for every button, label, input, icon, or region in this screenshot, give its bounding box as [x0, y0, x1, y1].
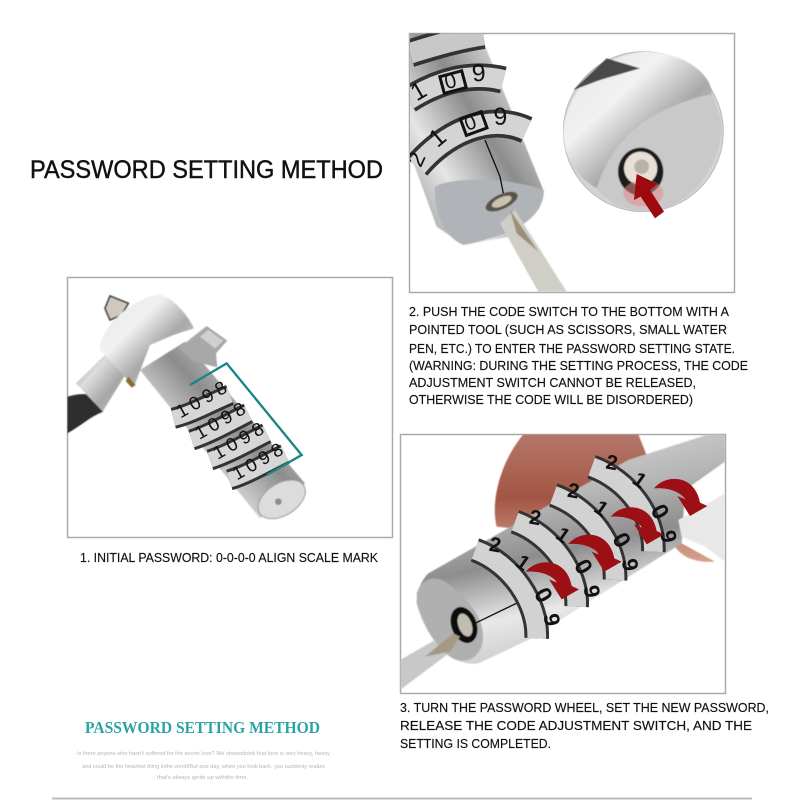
icon: red curved arrows — [526, 479, 707, 599]
icon: fingers turning wheels: 0 — [529, 583, 558, 607]
footer faint text: and could be the heaviest thing inthe world!But one day, when you look back, you suddenly realize — [82, 764, 325, 770]
text block: step 2: ADJUSTMENT SWITCH CANNOT BE RELEASED, — [409, 375, 696, 390]
footer faint text: that's always ignite up withthe time. — [157, 775, 248, 781]
icon: lock end with screwdriver: 9 — [493, 103, 508, 131]
footer heading: PASSWORD SETTING METHOD — [85, 718, 320, 737]
icon: red arrow — [634, 174, 664, 218]
icon: lock end with screwdriver: 0 — [462, 111, 479, 136]
icon: fingers turning wheels: 9 — [617, 557, 643, 573]
text block: step 3: SETTING IS COMPLETED. — [400, 736, 551, 751]
icon: fingers turning wheels: 2 — [527, 506, 543, 530]
icon: lock with four number wheels: 1 0 9 8 — [191, 398, 249, 443]
text block: step 2: OTHERWISE THE CODE WILL BE DISORDERED) — [409, 392, 693, 407]
icon: lock end with screwdriver: 9 — [471, 60, 487, 88]
icon: lock with four number wheels — [67, 294, 312, 527]
icon: lock with four number wheels: 1 0 9 8 — [228, 439, 286, 484]
icon: fingers turning wheels: 0 — [569, 554, 598, 579]
text block: step 2: PEN, ETC.) TO ENTER THE PASSWORD SETTING STATE. — [409, 341, 735, 356]
icon: fingers turning wheels: 2 — [487, 533, 503, 558]
icon: lock end with screwdriver: 1 — [406, 77, 432, 107]
icon: fingers turning wheels: 1 — [511, 550, 534, 576]
icon: lock with four number wheels: 1 0 9 8 — [209, 418, 267, 463]
icon: fingers turning wheels — [400, 434, 725, 690]
icon: fingers turning wheels: 1 — [590, 496, 612, 521]
icon: fingers turning wheels: 9 — [578, 583, 605, 600]
icon: fingers turning wheels: 9 — [538, 612, 565, 628]
text block: step 3: RELEASE THE CODE ADJUSTMENT SWITCH, AND THE — [400, 718, 752, 733]
footer faint text: Is there anyone who hasn't suffered for the secret love? We shewsdnink that love is very heavy, heavy — [77, 751, 331, 757]
icon: lock end with screwdriver: 2 — [402, 148, 431, 170]
icon: fingers turning wheels: 0 — [607, 528, 636, 552]
icon: lock end with screwdriver — [402, 33, 723, 292]
caption: step 1: 1. INITIAL PASSWORD: 0-0-0-0 ALIGN SCALE MARK — [80, 550, 378, 565]
icon: fingers turning wheels: 1 — [628, 468, 651, 493]
text block: step 2: 2. PUSH THE CODE SWITCH TO THE BOTTOM WITH A — [409, 304, 729, 319]
panel: step 3 photo — [400, 434, 726, 694]
icon: lock with four number wheels: 1 0 9 8 — [172, 377, 230, 422]
panel: step 2 photo — [402, 33, 734, 293]
icon: fingers turning wheels: 0 — [646, 499, 675, 524]
icon: lock end with screwdriver: 1 — [424, 123, 452, 153]
icon: fingers turning wheels: 2 — [604, 451, 619, 475]
icon: teal scale-mark outline — [190, 363, 302, 475]
footer faint text — [77, 751, 331, 781]
icon: fingers turning wheels: 2 — [566, 479, 581, 504]
icon: fingers turning wheels: 1 — [551, 523, 574, 548]
text block: step 3 — [400, 700, 769, 751]
icon: fingers turning wheels: 9 — [655, 528, 682, 545]
text block: step 3: 3. TURN THE PASSWORD WHEEL, SET THE NEW PASSWORD, — [400, 700, 769, 715]
text block: step 2: (WARNING: DURING THE SETTING PROCESS, THE CODE — [409, 358, 748, 373]
text block: step 2 — [409, 304, 748, 407]
panel: step 1 photo — [67, 278, 393, 538]
text block: step 2: POINTED TOOL (SUCH AS SCISSORS, SMALL WATER — [409, 322, 727, 337]
icon: magnified inset circle — [563, 52, 723, 218]
icon: lock end with screwdriver: 0 — [442, 69, 459, 94]
title: PASSWORD SETTING METHOD — [30, 156, 383, 184]
